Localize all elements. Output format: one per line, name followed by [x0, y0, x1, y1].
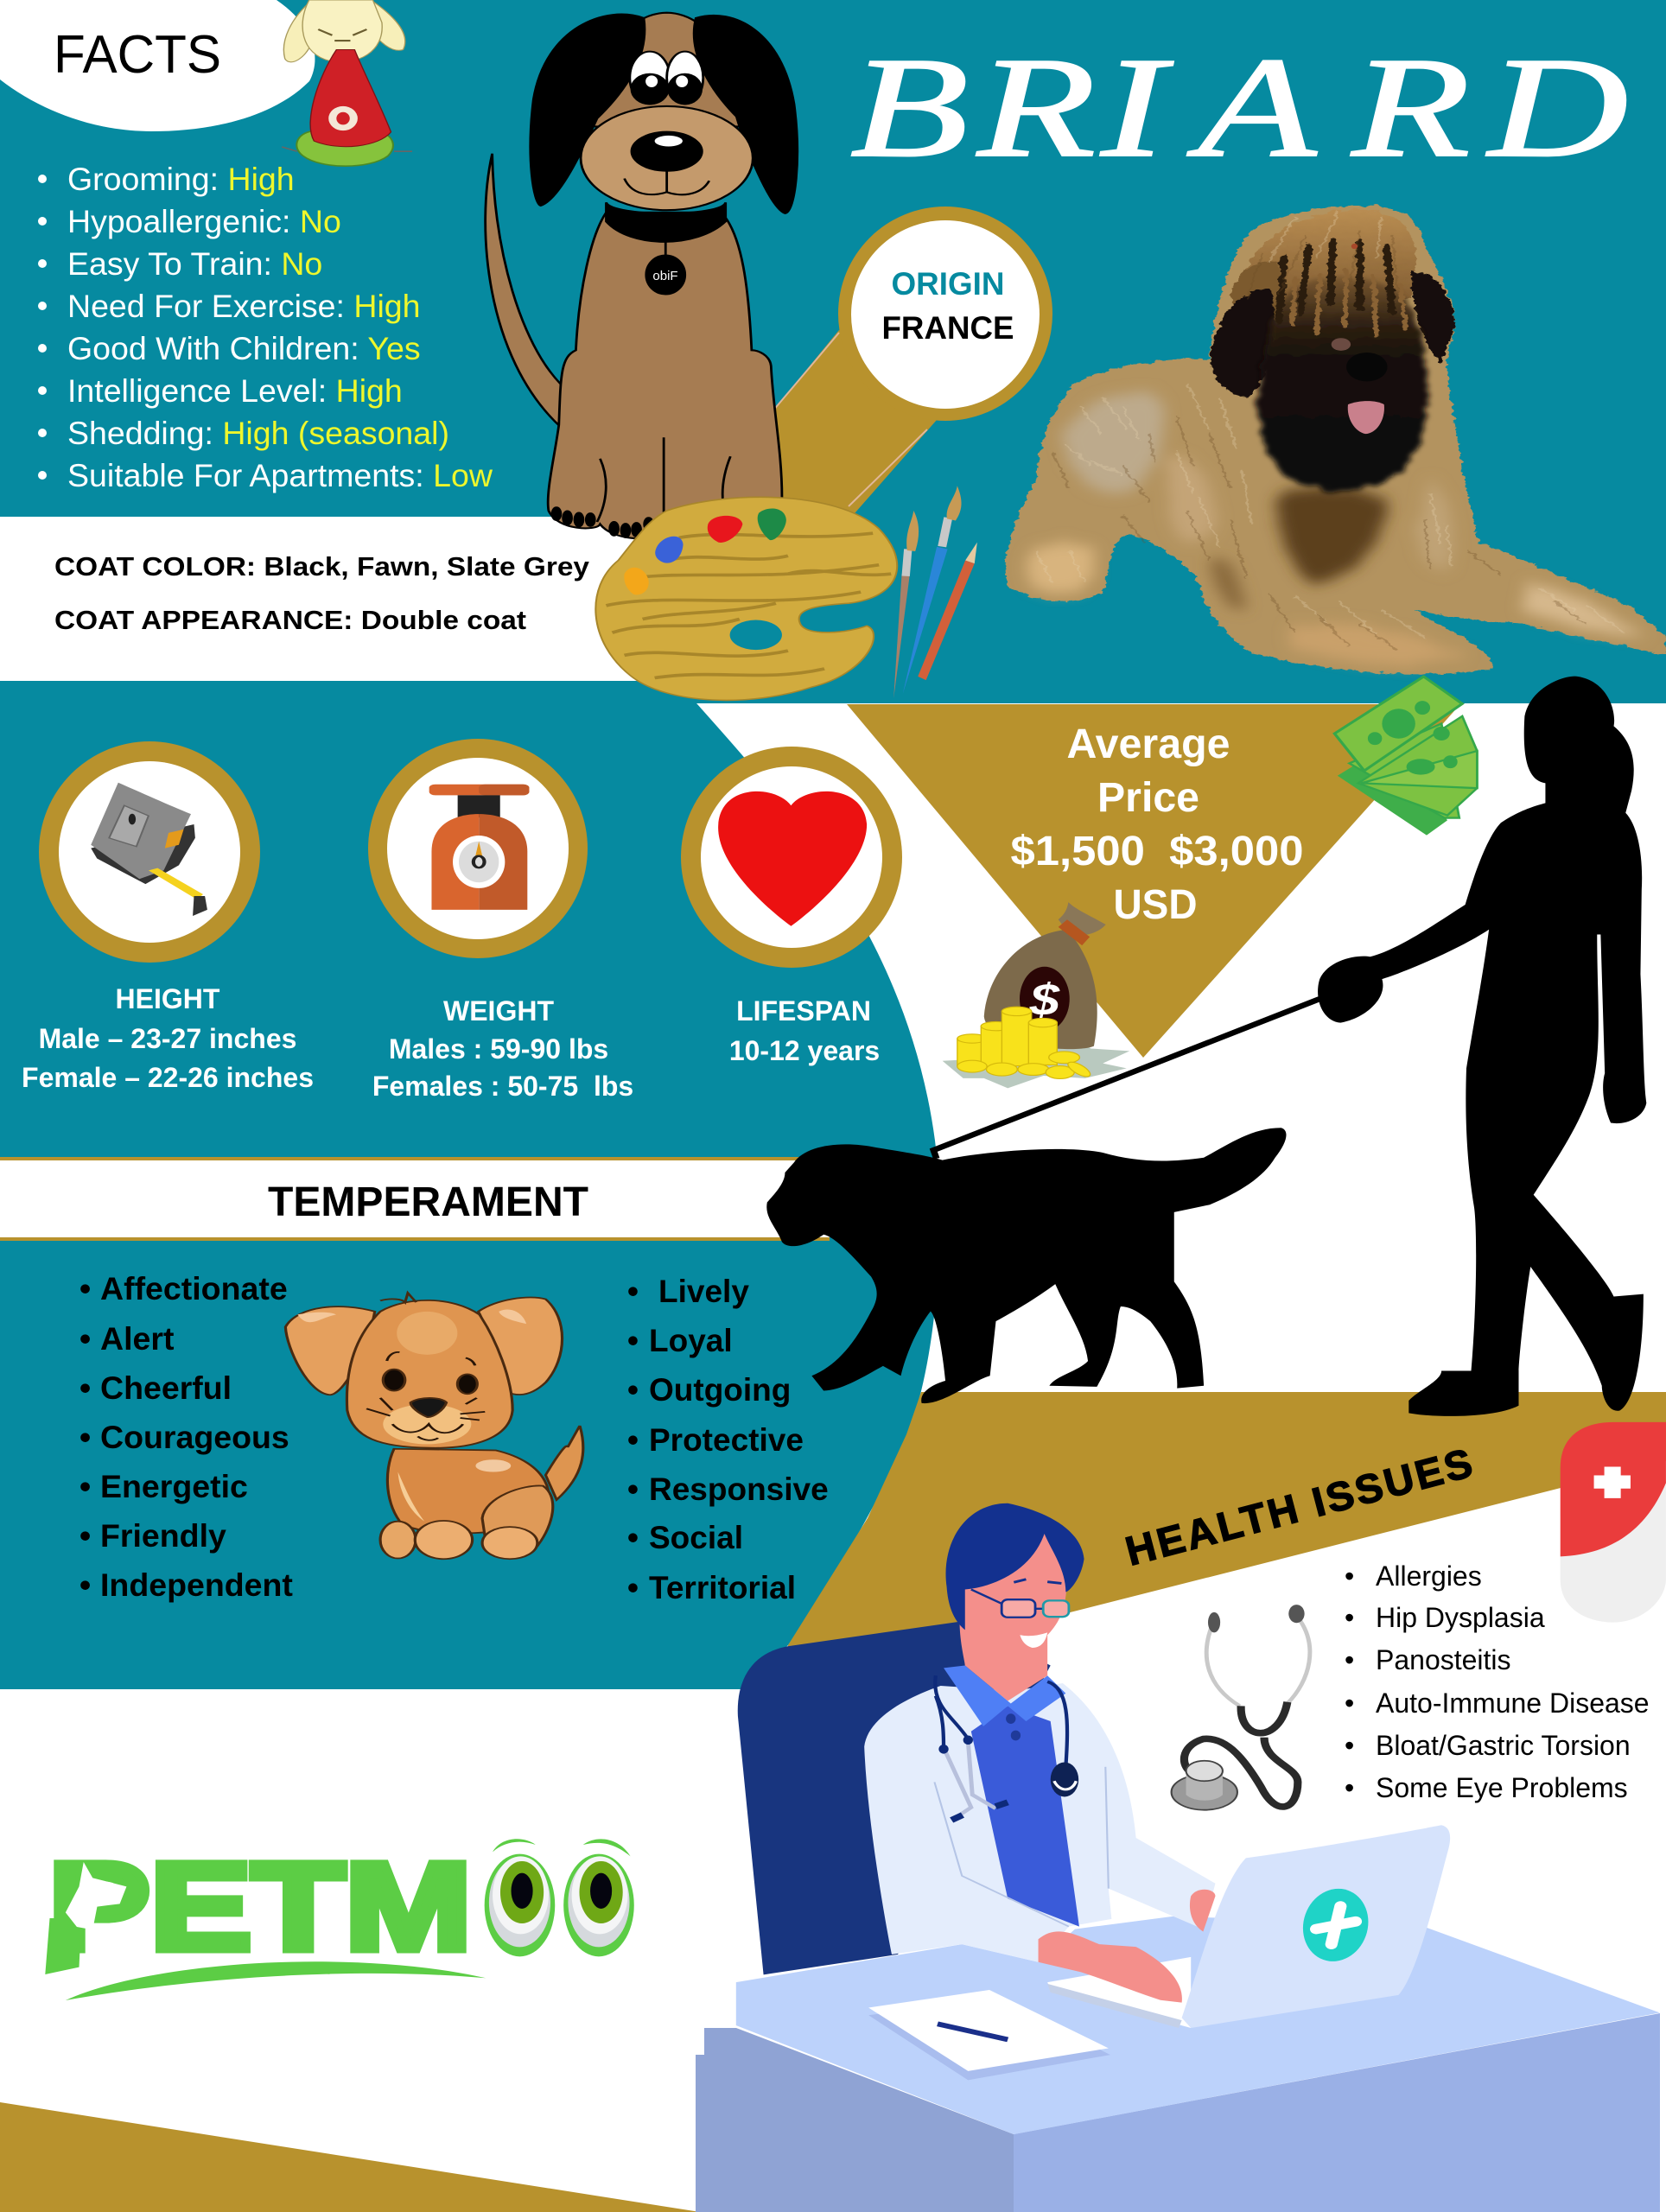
temperament list left: Independent [100, 1567, 293, 1603]
health list: • [1345, 1644, 1354, 1675]
temperament list left: • [79, 1567, 91, 1603]
panel: gold health banner [778, 1392, 1666, 1687]
height label [22, 983, 314, 1093]
temperament list right: Protective [649, 1422, 804, 1458]
temperament list right: • [627, 1274, 639, 1309]
icon: cartoon puppy [285, 1293, 583, 1559]
neck stethoscope [935, 1675, 1078, 1820]
panel: temperament heading band [0, 1157, 830, 1241]
icon: stethoscope [1172, 1605, 1310, 1810]
origin beam [764, 330, 937, 527]
temperament list left: • [79, 1517, 91, 1554]
facts list: Easy To Train: No [67, 245, 322, 282]
temperament list right: • [627, 1422, 639, 1458]
facts list: Good With Children: Yes [67, 330, 421, 366]
temperament list right: • [627, 1570, 639, 1605]
laptop base [1047, 1957, 1191, 2028]
weight label: Males : 59-90 lbs [389, 1033, 608, 1065]
temperament list right: • [627, 1520, 639, 1555]
doctor head [959, 1534, 1066, 1701]
painter palette [595, 497, 897, 700]
illustration: doctor at laptop [736, 1503, 1660, 2134]
icon: heart lifespan badge [681, 747, 902, 1066]
laptop screen [1182, 1825, 1450, 2028]
temperament list right: Lively [658, 1274, 749, 1309]
temperament list right: Social [649, 1520, 743, 1555]
temperament list right: Outgoing [649, 1372, 791, 1408]
temperament list left: • [79, 1468, 91, 1504]
panel: top teal background [0, 0, 1666, 703]
panel: gold price triangle [847, 704, 1460, 1058]
weight label: WEIGHT [443, 995, 554, 1027]
temperament list left [79, 1270, 293, 1603]
temperament list right [627, 1274, 829, 1605]
price text [1011, 721, 1303, 928]
heading: temperament: TEMPERAMENT [268, 1179, 588, 1225]
desk top [736, 1916, 1660, 2134]
health list: • [1345, 1602, 1354, 1633]
panel: coat band [0, 517, 743, 681]
temperament list right: Territorial [649, 1570, 796, 1605]
coat text [54, 551, 590, 635]
collar tag text: obiF [652, 269, 678, 283]
lifespan label: 10-12 years [729, 1035, 880, 1066]
weight label [372, 995, 633, 1102]
temperament list left: • [79, 1370, 91, 1406]
height label: HEIGHT [116, 983, 220, 1014]
silhouette: woman walking dog [766, 677, 1646, 1416]
health list: Hip Dysplasia [1376, 1602, 1545, 1633]
price text: Price [1097, 775, 1199, 821]
icon: pill [1561, 1422, 1666, 1623]
health list: Panosteitis [1376, 1644, 1511, 1675]
doctor shirt [971, 1706, 1079, 1927]
icon: rabbit eating meat [282, 0, 412, 166]
logo wordmark: PETM [48, 1837, 472, 1976]
temperament list left: • [79, 1419, 91, 1455]
cartoon dog with collar [486, 13, 798, 538]
temperament list right: • [627, 1471, 639, 1507]
lifespan label: LIFESPAN [736, 995, 871, 1027]
far hand [1190, 1890, 1215, 1932]
panel: measurements teal background [0, 681, 939, 1689]
facts list: Hypoallergenic: No [67, 203, 341, 239]
coat text: COAT APPEARANCE: Double coat [54, 605, 526, 635]
temperament list left: Alert [100, 1320, 175, 1357]
logo: PetMoo [45, 1837, 634, 2000]
temperament list left: Affectionate [100, 1270, 288, 1306]
health list: Some Eye Problems [1376, 1772, 1628, 1803]
photo: briard dog [1006, 206, 1666, 674]
icon: banknotes [1334, 677, 1477, 836]
lifespan label [729, 995, 880, 1066]
weight label: Females : 50-75 lbs [372, 1071, 633, 1102]
facts heading bubble [0, 0, 315, 131]
price text: $1,500 $3,000 [1011, 829, 1303, 874]
temperament list left: Energetic [100, 1468, 248, 1504]
heading: health issues: HEALTH ISSUES [1121, 1440, 1477, 1574]
facts list: Grooming: High [67, 161, 295, 197]
temperament list right: • [627, 1323, 639, 1358]
height label: Male – 23-27 inches [39, 1023, 296, 1054]
health list [1345, 1560, 1650, 1803]
health list: Allergies [1376, 1560, 1482, 1592]
near hand [1039, 1931, 1182, 2003]
leash [933, 999, 1319, 1159]
health list: • [1345, 1772, 1354, 1803]
origin country: FRANCE [881, 310, 1014, 346]
illustration: desk [696, 2013, 1660, 2212]
chair [738, 1621, 1051, 1974]
doctor glasses [971, 1589, 1043, 1609]
origin badge [838, 207, 1052, 421]
panel: gold corner [0, 2102, 700, 2212]
doctor coat [864, 1683, 1215, 1962]
price text: USD [1113, 882, 1198, 928]
title: BRIARD [850, 28, 1628, 187]
origin label: ORIGIN [892, 266, 1004, 302]
icon: tape measure badge [22, 741, 314, 1093]
temperament list left: • [79, 1320, 91, 1357]
icon: weight scale badge [368, 739, 633, 1102]
price text: Average [1066, 721, 1230, 767]
coat text: COAT COLOR: Black, Fawn, Slate Grey [54, 551, 590, 582]
temperament list left: Courageous [100, 1419, 289, 1455]
laptop medical icon [1298, 1885, 1374, 1965]
notebook and pen [868, 1998, 1110, 2080]
temperament list left: Cheerful [100, 1370, 232, 1406]
facts list: Intelligence Level: High [67, 372, 403, 409]
silhouette: dog [766, 1128, 1286, 1403]
health list: Auto-Immune Disease [1376, 1688, 1650, 1719]
temperament list left: • [79, 1270, 91, 1306]
health list: • [1345, 1730, 1354, 1761]
temperament list right: Responsive [649, 1471, 829, 1507]
brushes [893, 486, 977, 698]
health list: Bloat/Gastric Torsion [1376, 1730, 1631, 1761]
facts list: Need For Exercise: High [67, 288, 420, 324]
facts list: Shedding: High (seasonal) [67, 415, 449, 451]
height label: Female – 22-26 inches [22, 1062, 314, 1093]
icon: money bag and coins [943, 902, 1129, 1088]
silhouette: woman [1318, 677, 1646, 1416]
health list: • [1345, 1560, 1354, 1592]
health list: • [1345, 1688, 1354, 1719]
temperament list right: • [627, 1372, 639, 1408]
icon: money bag and coins: $ [1029, 975, 1060, 1025]
temperament list right: Loyal [649, 1323, 733, 1358]
heading: facts: FACTS [54, 25, 221, 85]
temperament list left: Friendly [100, 1517, 226, 1554]
facts list: Suitable For Apartments: Low [67, 457, 493, 493]
facts list [38, 161, 493, 493]
doctor hair [945, 1503, 1084, 1630]
